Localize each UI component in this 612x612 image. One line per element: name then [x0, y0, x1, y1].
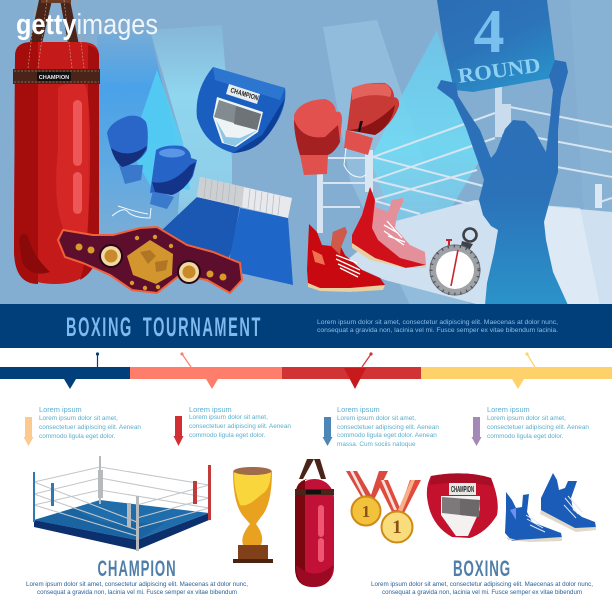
boxing text: Lorem ipsum dolor sit amet, consectetur adipiscing elit. Maecenas at dolor nunc, [371, 581, 593, 588]
bag label [37, 72, 71, 81]
guard label [226, 84, 260, 104]
boxing ring illustration [33, 456, 211, 551]
belt medallions [99, 244, 201, 284]
silhouette [437, 60, 568, 305]
step 4: commodo ligula eget dolor. [487, 433, 564, 440]
gold medals: 1 [392, 517, 402, 538]
red boxing boot [307, 224, 385, 292]
blue head guard: CHAMPION [229, 87, 259, 102]
champion heading: CHAMPION [98, 556, 176, 581]
championship belt [58, 227, 242, 293]
banner text [317, 319, 558, 334]
boxing text [371, 581, 593, 596]
ring posts [33, 456, 211, 551]
step 1: consectetuer adipiscing elit. Aenean [39, 424, 141, 431]
step 4 [472, 405, 589, 446]
banner title: BOXING TOURNAMENT [66, 312, 262, 342]
boxing heading: BOXING [453, 556, 511, 581]
step 3: Lorem ipsum dolor sit amet, [337, 415, 416, 422]
step text: Lorem ipsum [487, 405, 530, 414]
watermark logo: gettyimages [16, 9, 158, 41]
step 2 [174, 405, 291, 446]
timeline [0, 352, 612, 389]
red boxing gloves [294, 83, 399, 177]
hero background with spotlights [0, 0, 612, 305]
woman silhouette holding round card [437, 0, 568, 305]
gold medals [346, 471, 421, 542]
round card [437, 0, 557, 92]
punching bag large [13, 0, 100, 284]
step 3: commodo ligula eget dolor. Aenean [337, 432, 437, 439]
champion text [26, 581, 248, 596]
punching bag large: CHAMPION [39, 75, 69, 81]
boxing ring floor [345, 200, 612, 305]
trophy [233, 467, 273, 563]
timeline bar [0, 367, 612, 379]
step 3 [322, 405, 439, 448]
step text: Lorem ipsum [189, 405, 232, 414]
arrow [174, 416, 184, 446]
red guard label [449, 483, 476, 495]
step text: Lorem ipsum [337, 405, 380, 414]
stopwatch [430, 228, 480, 295]
blue shorts [162, 177, 293, 285]
step 1: Lorem ipsum dolor sit amet, [39, 415, 118, 422]
step 1: commodo ligula eget dolor. [39, 433, 116, 440]
step 4: Lorem ipsum dolor sit amet, [487, 415, 566, 422]
arrow [322, 417, 332, 446]
red head guard [427, 473, 498, 538]
medal numerals: 1 [362, 502, 370, 521]
champion text: consequat a gravida non, lacinia vel mi. Fusce semper ex vitae bibendum [37, 589, 237, 596]
champion text: Lorem ipsum dolor sit amet, consectetur adipiscing elit. Maecenas at dolor nunc, [26, 581, 248, 588]
step 2: commodo ligula eget dolor. [189, 432, 266, 439]
ring posts and ropes [317, 87, 612, 233]
step 2: consectetuer adipiscing elit. Aenean [189, 423, 291, 430]
step text: Lorem ipsum [39, 405, 82, 414]
small punching bag [295, 459, 334, 587]
step 2: Lorem ipsum dolor sit amet, [189, 414, 268, 421]
red head guard: CHAMPION [451, 485, 474, 494]
arrow [24, 417, 34, 446]
card word: ROUND [456, 53, 542, 88]
arrow [472, 417, 482, 446]
step 3: massa. Cum sociis natoque [337, 441, 416, 448]
banner text: consequat a gravida non, lacinia vel mi. Fusce semper ex vitae bibendum lacinia. [317, 327, 558, 334]
pink boxing boot [352, 187, 426, 268]
banner text: Lorem ipsum dolor sit amet, consectetur adipiscing elit. Maecenas at dolor nunc, [317, 319, 558, 326]
step 3: consectetuer adipiscing elit. Aenean [337, 424, 439, 431]
step 1 [24, 405, 141, 446]
title banner [0, 304, 612, 348]
card number: 4 [474, 0, 504, 66]
blue skates [505, 473, 596, 542]
blue head guard [197, 67, 285, 153]
step 4: consectetuer adipiscing elit. Aenean [487, 424, 589, 431]
timeline markers [64, 368, 524, 389]
blue boxing gloves [107, 116, 197, 218]
timeline pins [96, 352, 535, 367]
boxing text: consequat a gravida non, lacinia vel mi. Fusce semper ex vitae bibendum [382, 589, 582, 596]
small bag label [306, 490, 321, 494]
